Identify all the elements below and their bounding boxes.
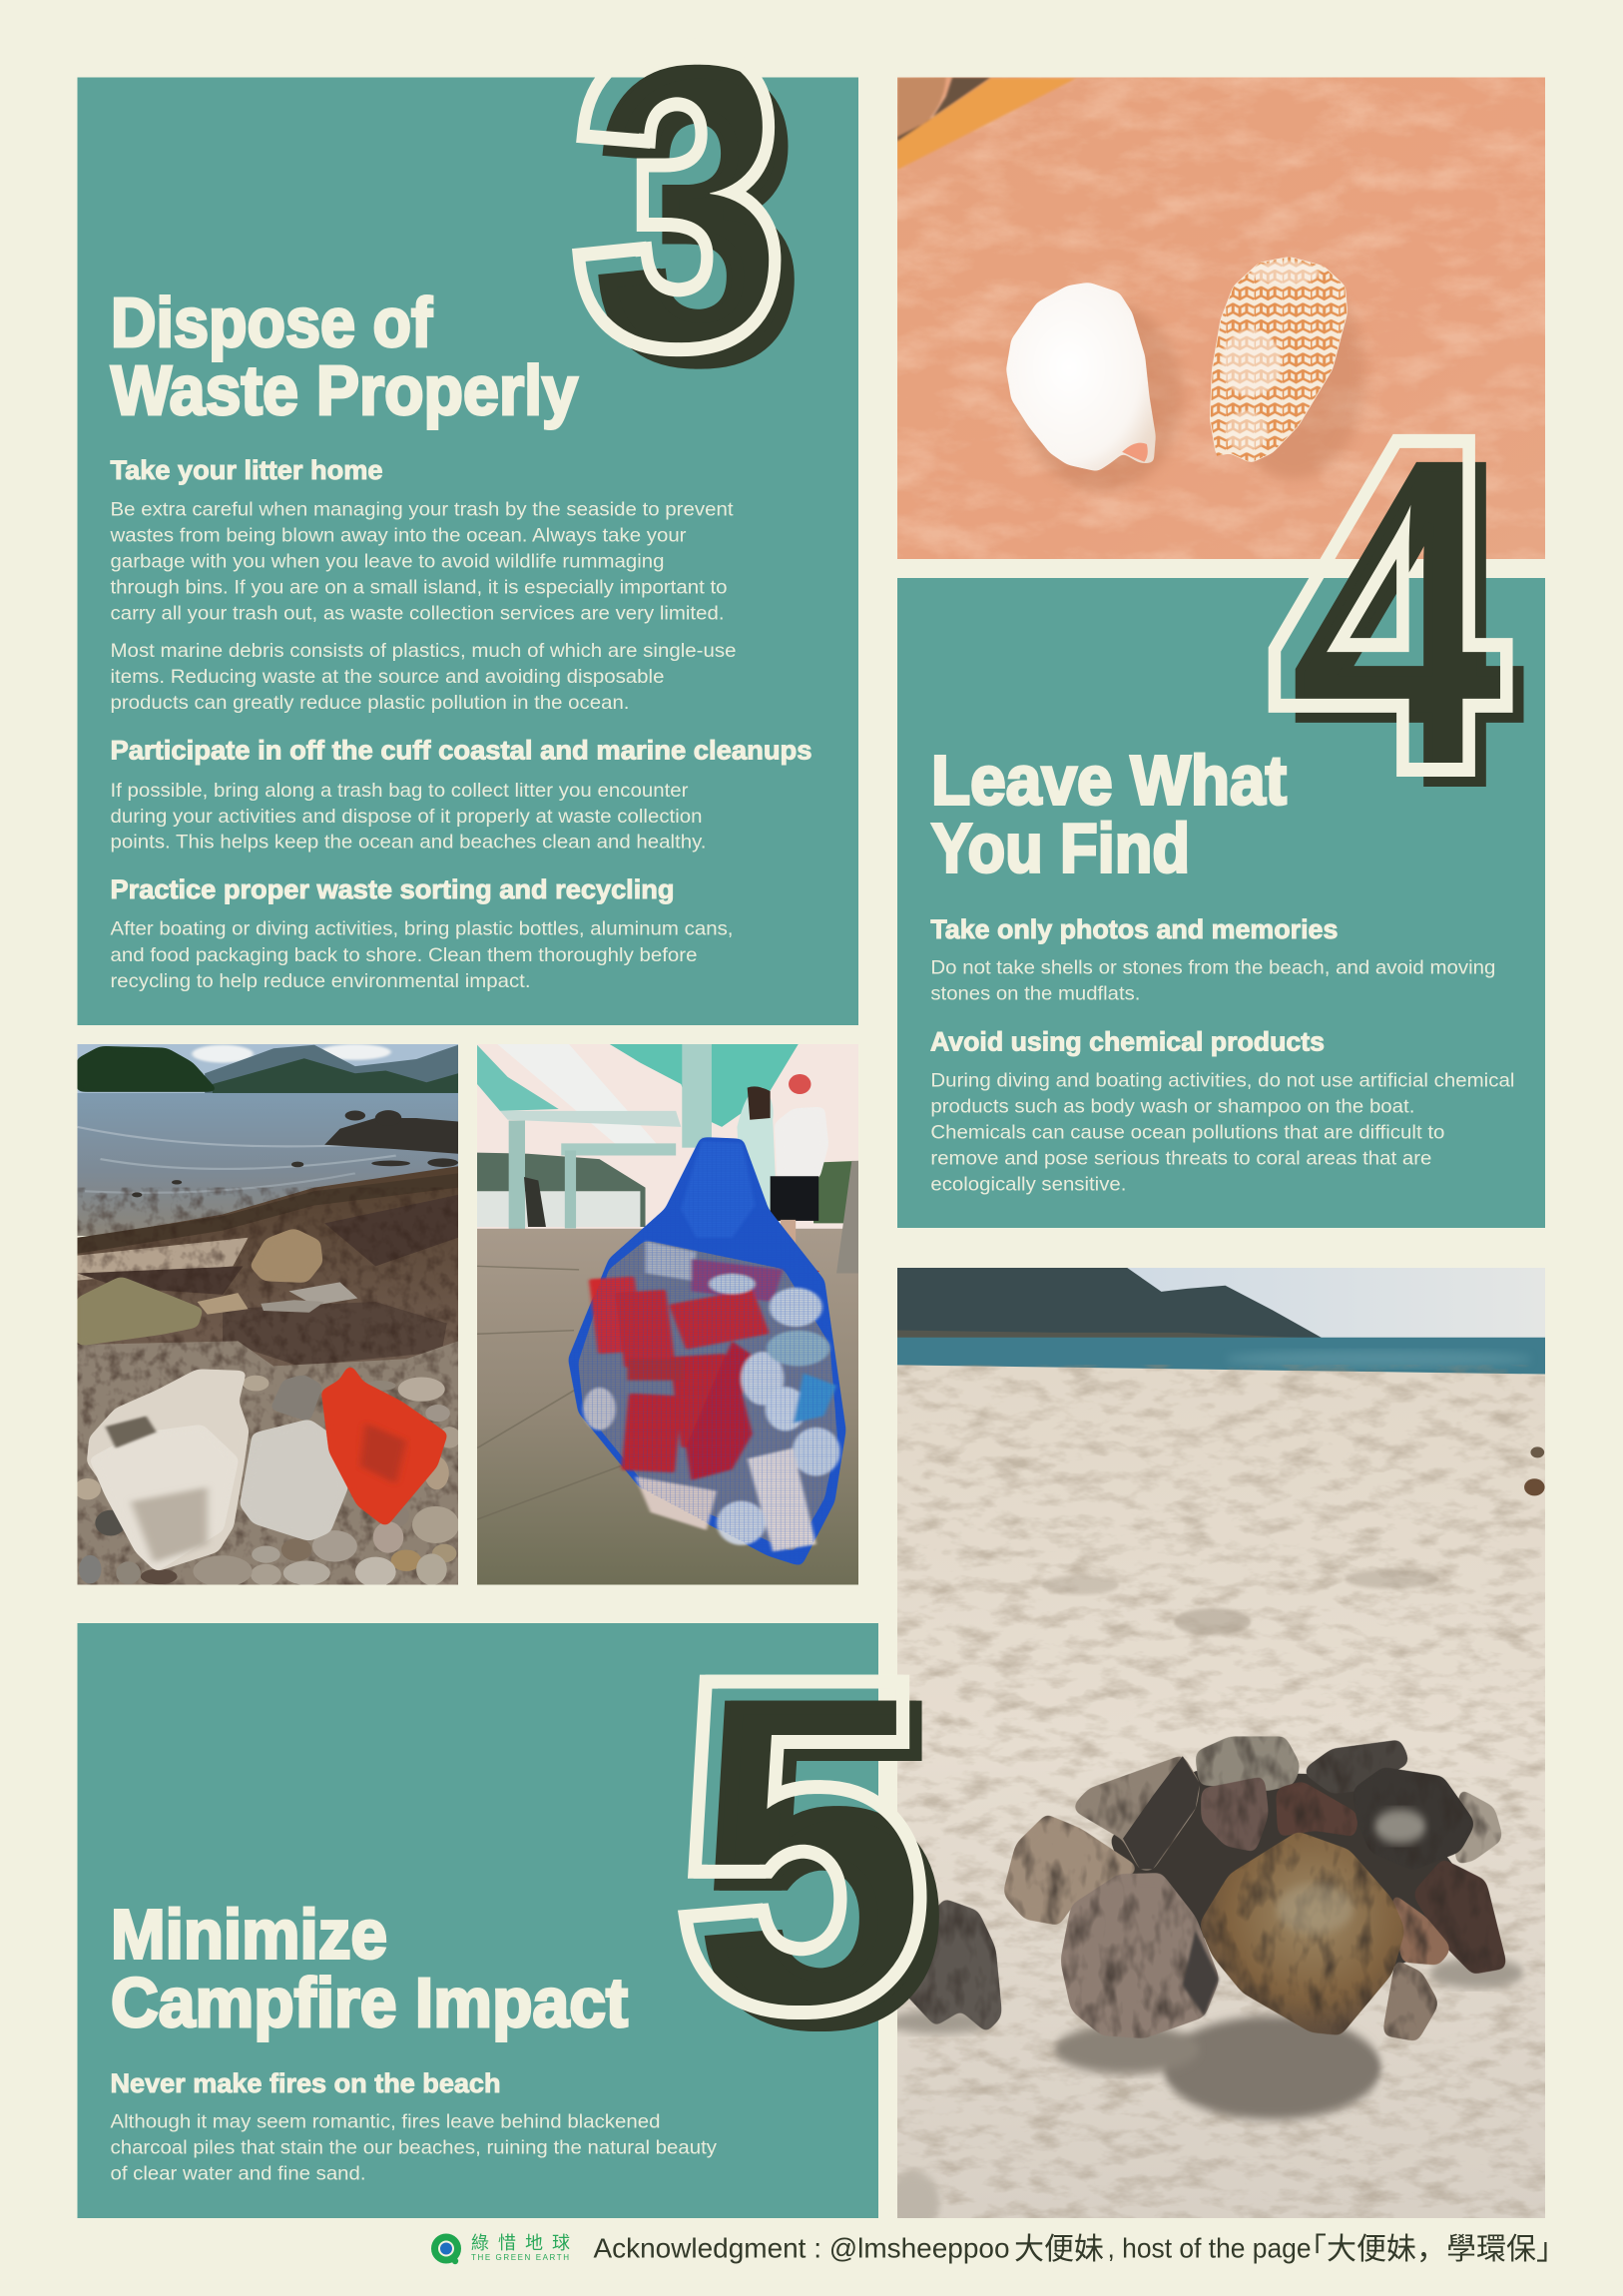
- text block: cleanups: points. This helps keep the ocean and beaches clean and healthy.: [110, 832, 707, 854]
- subheading: never make fires: Never make fires on the beach: [110, 2068, 501, 2098]
- acknowledgment footer: 大便妹: [1014, 2233, 1104, 2266]
- heading: dispose of waste properly: [111, 284, 578, 429]
- number 3: 3: [597, 0, 796, 444]
- text block: never make fires: Although it may seem romantic, fires leave behind blackened: [110, 2111, 661, 2133]
- acknowledgment footer: [593, 2232, 1566, 2266]
- acknowledgment footer: Acknowledgment : @lmsheeppoo: [593, 2232, 1010, 2264]
- heading: leave what you find: Leave What: [931, 742, 1287, 820]
- text block: photos and memories: Do not take shells or stones from the beach, and avoid moving: [930, 957, 1495, 979]
- number 5: 5: [705, 1609, 944, 2117]
- number 3: 3: [602, 0, 802, 444]
- text block: litter home: wastes from being blown away into the ocean. Always take your: [109, 525, 687, 547]
- subheading: sorting and recycling: Practice proper waste sorting and recycling: [110, 874, 675, 904]
- text block: litter home: garbage with you when you leave to avoid wildlife rummaging: [110, 551, 665, 573]
- text block: chemical products: ecologically sensitive.: [930, 1173, 1126, 1195]
- text block: marine debris: products can greatly reduce plastic pollution in the ocean.: [110, 692, 629, 714]
- text block: litter home: Be extra careful when managing your trash by the seaside to prevent: [110, 499, 734, 521]
- icon: charred ash in the fire pit: [1110, 1771, 1455, 1980]
- heading: leave what you find: You Find: [931, 809, 1190, 886]
- photo: litter bags on a rocky shore: [78, 1044, 458, 1585]
- text block: never make fires: of clear water and fine sand.: [110, 2162, 365, 2184]
- heading: minimize campfire impact: Minimize: [111, 1896, 387, 1974]
- text block: cleanups: during your activities and dispose of it properly at waste collection: [110, 806, 703, 828]
- number 4: 4: [1294, 368, 1524, 879]
- acknowledgment footer: 「大便妹，學環保」: [1297, 2233, 1566, 2266]
- text block: photos and memories: [930, 957, 1495, 1005]
- text block: never make fires: [110, 2111, 717, 2184]
- logo: the green earth: THE GREEN EARTH: [471, 2253, 569, 2262]
- heading: minimize campfire impact: Campfire Impact: [111, 1964, 628, 2041]
- photo: campfire rocks on a sandy beach: [897, 1268, 1545, 2218]
- text block: chemical products: products such as body wash or shampoo on the boat.: [930, 1095, 1414, 1117]
- subheading: photos and memories: Take only photos and memories: [930, 914, 1338, 944]
- text block: never make fires: charcoal piles that stain the our beaches, ruining the natural beauty: [110, 2137, 717, 2159]
- number 5: [678, 1675, 939, 2031]
- acknowledgment footer: , host of the page: [1108, 2232, 1312, 2264]
- text block: litter home: carry all your trash out, as waste collection services are very limited.: [110, 603, 725, 625]
- text block: marine debris: items. Reducing waste at the source and avoiding disposable: [110, 666, 665, 688]
- panel: dispose of waste properly: [78, 78, 858, 1025]
- text block: marine debris: Most marine debris consists of plastics, much of which are single-use: [110, 640, 737, 662]
- subheading: cleanups: Participate in off the cuff coastal and marine cleanups: [110, 736, 812, 766]
- number 5: 5: [699, 1609, 939, 2117]
- icon: green earth ring: [435, 2237, 458, 2264]
- text block: sorting and recycling: recycling to help reduce environmental impact.: [110, 970, 531, 992]
- panel: minimize campfire impact: [78, 1623, 878, 2218]
- text block: cleanups: If possible, bring along a trash bag to collect litter you encounter: [110, 780, 689, 802]
- text block: sorting and recycling: [110, 918, 734, 992]
- text block: litter home: [109, 499, 734, 625]
- logo: the green earth: [435, 2229, 570, 2264]
- text block: cleanups: [110, 780, 707, 854]
- number 3: [572, 64, 795, 369]
- subheading: chemical products: Avoid using chemical products: [930, 1027, 1325, 1057]
- text block: sorting and recycling: and food packaging back to shore. Clean them thoroughly before: [110, 944, 697, 966]
- text block: chemical products: During diving and boating activities, do not use artificial chemical: [930, 1069, 1514, 1091]
- heading: dispose of waste properly: Waste Properly: [111, 351, 578, 429]
- text block: marine debris: [110, 640, 737, 714]
- text block: litter home: through bins. If you are on a small island, it is especially important to: [110, 577, 728, 599]
- heading: dispose of waste properly: Dispose of: [111, 284, 433, 361]
- subheading: take your litter home: Take your litter home: [110, 455, 383, 485]
- logo: the green earth: 綠惜地球: [471, 2229, 570, 2255]
- text block: chemical products: Chemicals can cause ocean pollutions that are difficult to: [930, 1121, 1445, 1143]
- panel: leave what you find: [897, 578, 1545, 1228]
- photo: two sea shells on a salmon rock: [897, 78, 1545, 559]
- heading: leave what you find: [931, 742, 1287, 886]
- text block: chemical products: [930, 1069, 1514, 1195]
- text block: chemical products: remove and pose serious threats to coral areas that are: [930, 1147, 1431, 1169]
- photo: mesh bag full of aluminium cans on a pier: [477, 1044, 858, 1585]
- heading: minimize campfire impact: [111, 1896, 628, 2041]
- text block: sorting and recycling: After boating or diving activities, bring plastic bottles, aluminum cans,: [110, 918, 734, 940]
- text block: photos and memories: stones on the mudflats.: [930, 983, 1140, 1005]
